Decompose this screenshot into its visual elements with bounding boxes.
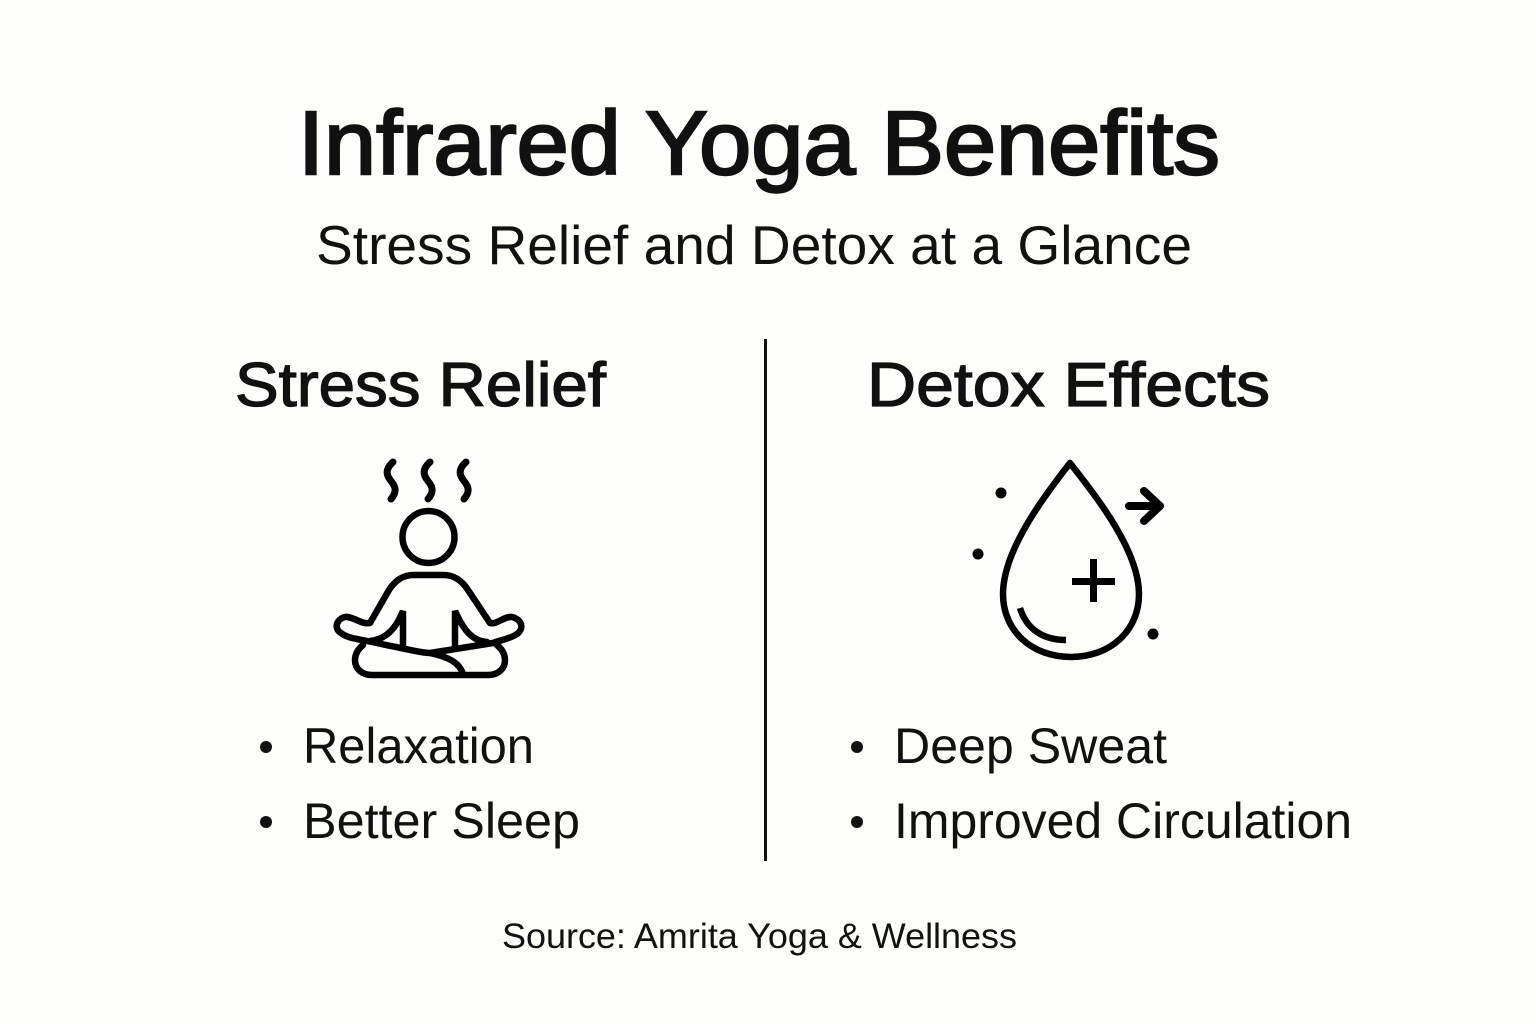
icon: meditating person with steam <box>337 462 521 675</box>
list: stress relief benefits <box>260 718 580 849</box>
panel: stress relief <box>235 351 607 849</box>
list: detox benefits: Improved Circulation <box>894 793 1352 849</box>
list: detox benefits: Deep Sweat <box>894 718 1167 774</box>
panel: detox effects <box>851 351 1352 849</box>
title: Infrared Yoga Benefits <box>298 94 1220 194</box>
center divider <box>764 339 767 861</box>
heading: stress relief: Stress Relief <box>235 351 607 420</box>
list: stress relief benefits: Relaxation <box>303 718 534 774</box>
heading: detox effects: Detox Effects <box>867 351 1270 420</box>
list: detox benefits <box>851 718 1352 849</box>
subtitle: Stress Relief and Detox at a Glance <box>316 214 1192 276</box>
source note: Source: Amrita Yoga & Wellness <box>502 917 1017 956</box>
list: stress relief benefits: Better Sleep <box>303 793 580 849</box>
icon: water drop with plus and arrow <box>972 463 1160 657</box>
